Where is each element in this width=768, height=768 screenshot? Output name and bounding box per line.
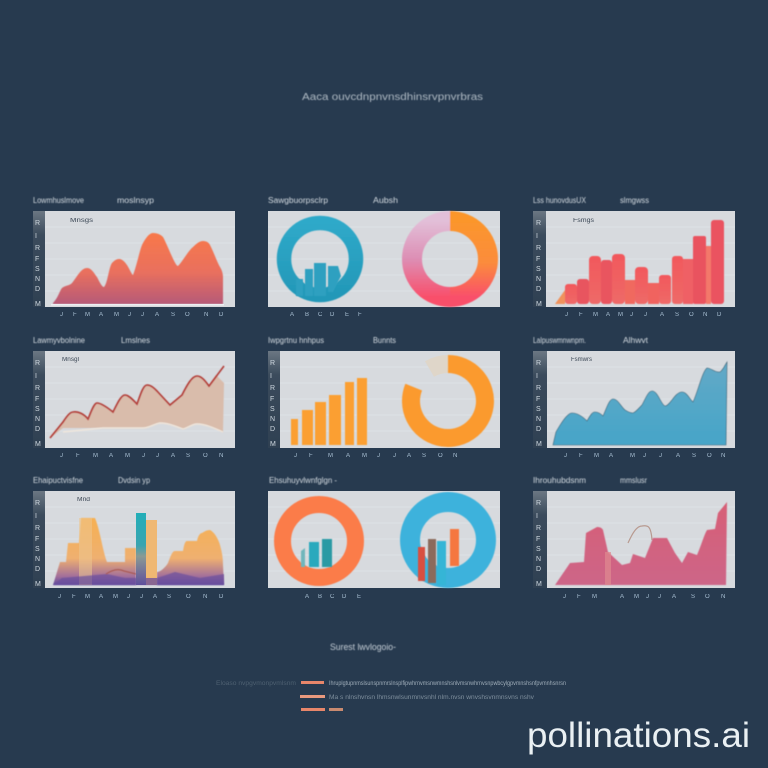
y axis labels: R [35, 525, 40, 532]
panel heading: Lss hunovdusUX [533, 196, 587, 205]
y axis labels: D [35, 566, 40, 573]
panel: ring and pink donut [268, 196, 500, 318]
y axis labels: R [35, 245, 40, 252]
legend row 2: Ma s nlnshvnsn lhmsnwlsunmnvsnhl nlm.nvsn wnvshsvnmnsvns nshv [329, 695, 534, 701]
x axis labels: JFMAMJJASON [564, 453, 725, 459]
pale curve [628, 526, 652, 543]
y axis labels: M [536, 581, 542, 588]
panel heading: Sawgbuorpsclrp [268, 196, 329, 205]
x axis labels: JFMAMJJASON [60, 453, 223, 459]
panel: pink area chart [533, 476, 735, 600]
y axis labels: I [536, 513, 538, 520]
teal bar [136, 513, 146, 585]
y axis labels: N [35, 276, 40, 283]
y axis labels: F [536, 536, 540, 543]
x axis labels: ABCDEF [290, 312, 362, 318]
x axis labels: JFMAMJJASOND [60, 312, 224, 318]
y axis labels: I [270, 373, 272, 380]
y axis labels: F [536, 396, 540, 403]
panel: orange bars and donut: Bunnts [373, 336, 396, 345]
y axis labels: R [35, 385, 40, 392]
teal bars [296, 263, 341, 296]
pale lower line [63, 423, 223, 432]
y axis labels: F [536, 256, 540, 263]
panel: peaks area chart: Mnsgs [70, 218, 93, 224]
panel: red bar chart: slmgwss [620, 196, 649, 205]
y axis labels: M [35, 301, 41, 308]
y axis labels: D [35, 286, 40, 293]
panel: layered gold chart: Mnd [77, 497, 90, 503]
lighter bar overlay [79, 518, 157, 585]
legend row 3 [301, 708, 343, 711]
donut gap [430, 364, 448, 369]
panel: line and tan area chart: Mnsgl [62, 357, 79, 363]
blue ring [410, 502, 486, 578]
panel heading: Lawmyvbolnine [33, 336, 86, 345]
watermark: pollinations.ai [527, 716, 750, 755]
coral ring [282, 504, 356, 578]
y axis labels: R [536, 220, 541, 227]
y axis labels: R [536, 525, 541, 532]
panel: peaks area chart [33, 196, 235, 318]
x axis labels: JFMAMJJASON [563, 594, 725, 600]
y axis labels: N [35, 416, 40, 423]
y axis labels: I [35, 513, 37, 520]
gradient donut [412, 221, 488, 297]
blue area [553, 362, 727, 445]
panel heading: Lalpuswmnwnpm. [533, 336, 586, 345]
y axis labels: S [536, 266, 541, 273]
y axis labels: R [536, 500, 541, 507]
legend row 1 [216, 681, 566, 687]
y axis labels: D [536, 286, 541, 293]
panel heading: Ehsuhuyvlwnfglgn - [269, 476, 337, 485]
red line [50, 366, 224, 438]
x axis labels: JFMAMJJASOND [565, 312, 722, 318]
y axis labels: S [35, 546, 40, 553]
y axis labels: S [35, 266, 40, 273]
panel: red bar chart: Fsmgs [573, 218, 594, 224]
y axis labels: F [270, 396, 274, 403]
purple base [53, 572, 224, 585]
ring bars [418, 529, 459, 585]
panel heading: Ehaipuctvisfne [33, 476, 84, 485]
y axis labels: S [270, 406, 275, 413]
y axis labels: M [536, 301, 542, 308]
pink area [555, 502, 727, 585]
y axis labels: N [536, 416, 541, 423]
panel: blue area chart: Fsmwrs [571, 357, 592, 363]
y axis labels: M [35, 581, 41, 588]
legend [216, 642, 566, 711]
valley line [106, 570, 136, 574]
y axis labels: R [536, 245, 541, 252]
y axis labels: F [35, 396, 39, 403]
x axis labels: JFMAMJJASON [294, 453, 457, 459]
y axis labels: D [35, 426, 40, 433]
panel heading: Iwpgrtnu hnhpus [268, 336, 324, 345]
y axis labels: I [536, 373, 538, 380]
panel: coral ring and blue ring [268, 476, 500, 600]
gold layered areas [53, 518, 224, 585]
orange donut [411, 364, 485, 438]
panel heading: Lowmhuslmove [33, 196, 85, 205]
legend row 1: Eloaso nvpgvmonpvmlsnm [216, 681, 296, 687]
y axis labels: R [536, 360, 541, 367]
y axis labels: D [270, 426, 275, 433]
y axis labels: M [270, 441, 276, 448]
y axis labels: I [536, 233, 538, 240]
y axis labels: D [536, 426, 541, 433]
legend row 1: Ihruplgtupnmslsunspnmrslnsplfipwhrnvmsnwmnshsnlvmsnwhrnvsnpwbcylgpvmnshsnfpvmnhsnrsn [329, 681, 566, 687]
y axis labels: S [536, 546, 541, 553]
y axis labels: F [35, 536, 39, 543]
x axis labels: JFMAMJJASOND [58, 594, 224, 600]
y axis labels: R [270, 385, 275, 392]
teal ring [284, 223, 356, 295]
y axis labels: M [536, 441, 542, 448]
y axis labels: N [536, 556, 541, 563]
panel: line and tan area chart: Lmslnes [121, 336, 150, 345]
y axis labels: R [35, 500, 40, 507]
y axis labels: N [536, 276, 541, 283]
x axis labels: ABCDE [305, 594, 361, 600]
panel: pink area chart: mmslusr [620, 476, 647, 485]
y axis labels: I [35, 233, 37, 240]
bars [555, 220, 724, 304]
gold bar [146, 520, 157, 585]
panel: line and tan area chart [33, 336, 235, 459]
y axis labels: N [270, 416, 275, 423]
y axis labels: R [35, 360, 40, 367]
area chart [53, 233, 223, 304]
legend title: Surest lwvlogoio- [330, 642, 396, 653]
tan area [50, 375, 224, 438]
panel: layered gold chart: Dvdsin yp [118, 476, 151, 485]
y axis labels: S [536, 406, 541, 413]
panel heading: Ihrouhubdsnm [533, 476, 586, 485]
panel: orange bars and donut [268, 336, 500, 459]
panel: layered gold chart [33, 476, 235, 600]
panel: blue area chart [533, 336, 735, 459]
y axis labels: S [35, 406, 40, 413]
y axis labels: F [35, 256, 39, 263]
panel: peaks area chart: moslnsyp [117, 196, 155, 205]
y axis labels: R [270, 360, 275, 367]
title: Aaca ouvcdnpnvnsdhinsrvpnvrbras [302, 92, 483, 103]
panel: blue area chart: Alhwvt [623, 336, 649, 345]
panel: ring and pink donut: Aubsh [373, 196, 398, 205]
y axis labels: R [536, 385, 541, 392]
y axis labels: I [35, 373, 37, 380]
y axis labels: R [35, 220, 40, 227]
teal bars [301, 548, 305, 567]
orange bars [291, 378, 367, 445]
y axis labels: M [35, 441, 41, 448]
y axis labels: N [35, 556, 40, 563]
panel: red bar chart [533, 196, 735, 318]
y axis labels: D [536, 566, 541, 573]
